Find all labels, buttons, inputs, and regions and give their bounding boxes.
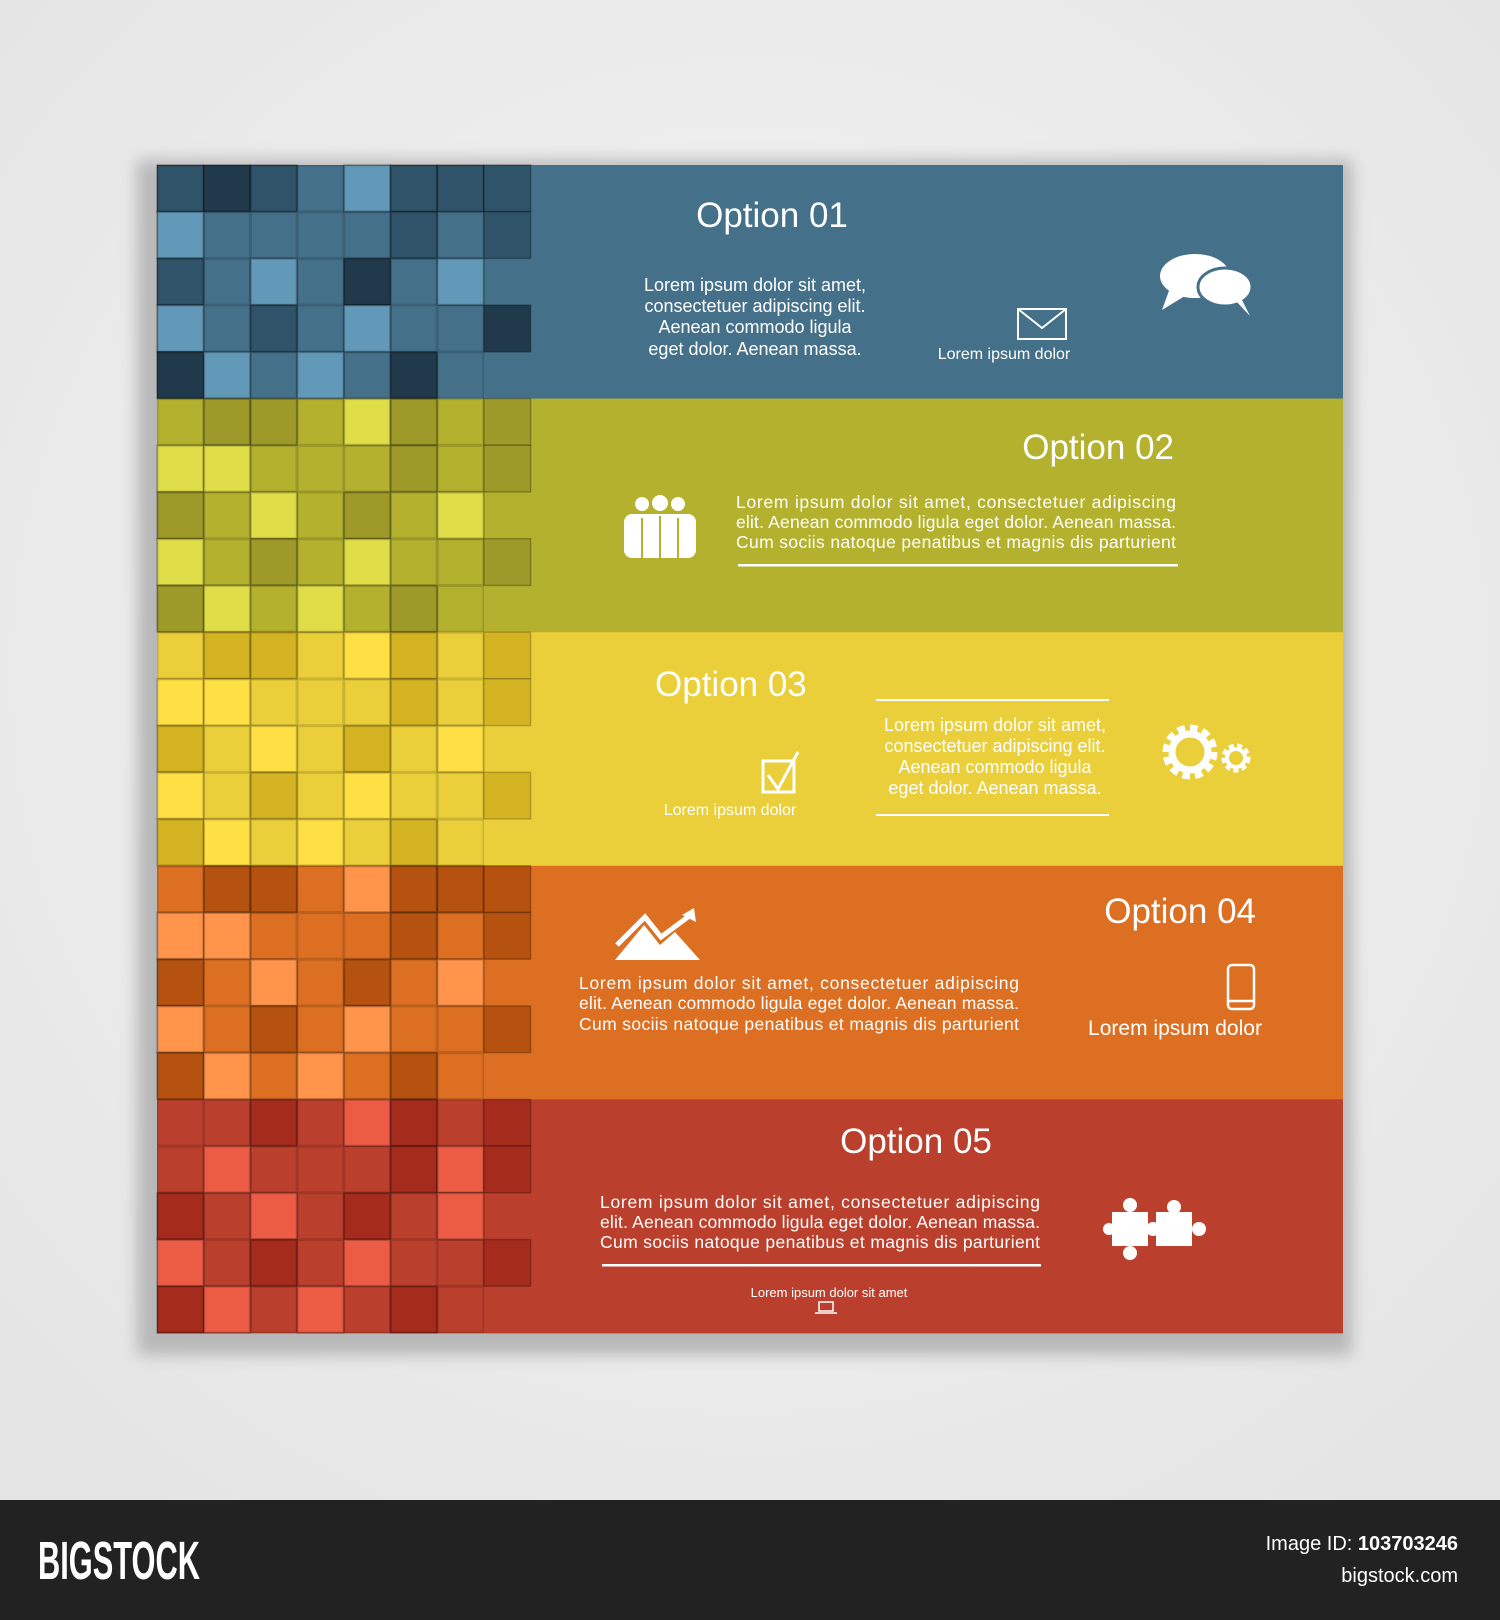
text block: option 05: Cum sociis natoque penatibus et magnis dis parturient xyxy=(600,1232,1040,1252)
footer bar xyxy=(0,1500,1500,1620)
option 03 content xyxy=(655,665,1247,819)
title: option 04: Option 04 xyxy=(1104,892,1256,931)
text block: option 01: eget dolor. Aenean massa. xyxy=(648,339,862,359)
icon: puzzle xyxy=(1103,1198,1206,1260)
icon: chart xyxy=(615,908,700,960)
icon: phone xyxy=(1228,965,1254,1009)
text block: option 01: Aenean commodo ligula xyxy=(658,317,853,337)
text block: option 01: consectetuer adipiscing elit. xyxy=(644,296,866,316)
icon: envelope xyxy=(1018,309,1066,339)
option 05 content xyxy=(600,1122,1206,1313)
icon: laptop xyxy=(815,1302,837,1313)
label: lorem ipsum dolor: Lorem ipsum dolor xyxy=(664,802,797,819)
option 01 content xyxy=(644,196,1252,363)
icon: speech bubbles xyxy=(1160,254,1252,316)
text block: option 03: Aenean commodo ligula xyxy=(898,757,1093,777)
footer logo: BIGSTOCK xyxy=(38,1531,200,1591)
text block: option 04: Lorem ipsum dolor sit amet, consectetuer adipiscing xyxy=(579,973,1019,993)
label: lorem ipsum dolor: Lorem ipsum dolor xyxy=(938,346,1071,363)
text block: option 02: elit. Aenean commodo ligula eget dolor. Aenean massa. xyxy=(736,512,1176,532)
mosaic: olive xyxy=(157,399,531,632)
mosaic: red xyxy=(157,1099,531,1333)
panel: option 05 band xyxy=(157,1099,1343,1333)
mosaic grid overlay xyxy=(157,165,484,1333)
option 02 content xyxy=(624,428,1178,566)
label: lorem ipsum dolor: Lorem ipsum dolor xyxy=(1088,1017,1262,1040)
mosaic: orange xyxy=(157,866,531,1099)
small label: Lorem ipsum dolor sit amet xyxy=(751,1285,908,1300)
panel shadow xyxy=(137,160,1352,1355)
title: option 05: Option 05 xyxy=(840,1122,992,1161)
panel: option 02 band xyxy=(157,399,1343,633)
text block: option 02: Lorem ipsum dolor sit amet, consectetuer adipiscing xyxy=(736,492,1176,512)
icon: gears xyxy=(1168,730,1247,774)
title: option 02: Option 02 xyxy=(1022,428,1174,467)
panel: option 03 band xyxy=(157,632,1343,866)
option 04 content xyxy=(579,892,1262,1040)
panel: option 01 band xyxy=(157,165,1343,399)
icon: checkbox xyxy=(763,752,798,792)
text block: option 05: elit. Aenean commodo ligula eget dolor. Aenean massa. xyxy=(600,1212,1040,1232)
text block: option 03: consectetuer adipiscing elit. xyxy=(884,736,1106,756)
underline xyxy=(738,564,1178,566)
icon: people xyxy=(624,495,696,560)
text block: option 02: Cum sociis natoque penatibus et magnis dis parturient xyxy=(736,532,1176,552)
text block: option 04: Cum sociis natoque penatibus et magnis dis parturient xyxy=(579,1014,1019,1034)
mosaic: yellow xyxy=(157,632,531,866)
text block: option 01: Lorem ipsum dolor sit amet, xyxy=(644,275,866,295)
title: option 03: Option 03 xyxy=(655,665,807,704)
text block: option 03: Lorem ipsum dolor sit amet, xyxy=(884,715,1106,735)
underline xyxy=(602,1264,1041,1266)
panel: option 04 band xyxy=(157,866,1343,1100)
mosaic: blue xyxy=(157,165,531,398)
footer url: bigstock.com xyxy=(1341,1565,1458,1587)
footer image id: Image ID: 103703246 xyxy=(1266,1533,1458,1555)
title: option 01: Option 01 xyxy=(696,196,848,235)
lines xyxy=(876,699,1109,701)
text block: option 03: eget dolor. Aenean massa. xyxy=(888,778,1102,798)
text block: option 04: elit. Aenean commodo ligula eget dolor. Aenean massa. xyxy=(579,993,1019,1013)
text block: option 05: Lorem ipsum dolor sit amet, consectetuer adipiscing xyxy=(600,1192,1040,1212)
